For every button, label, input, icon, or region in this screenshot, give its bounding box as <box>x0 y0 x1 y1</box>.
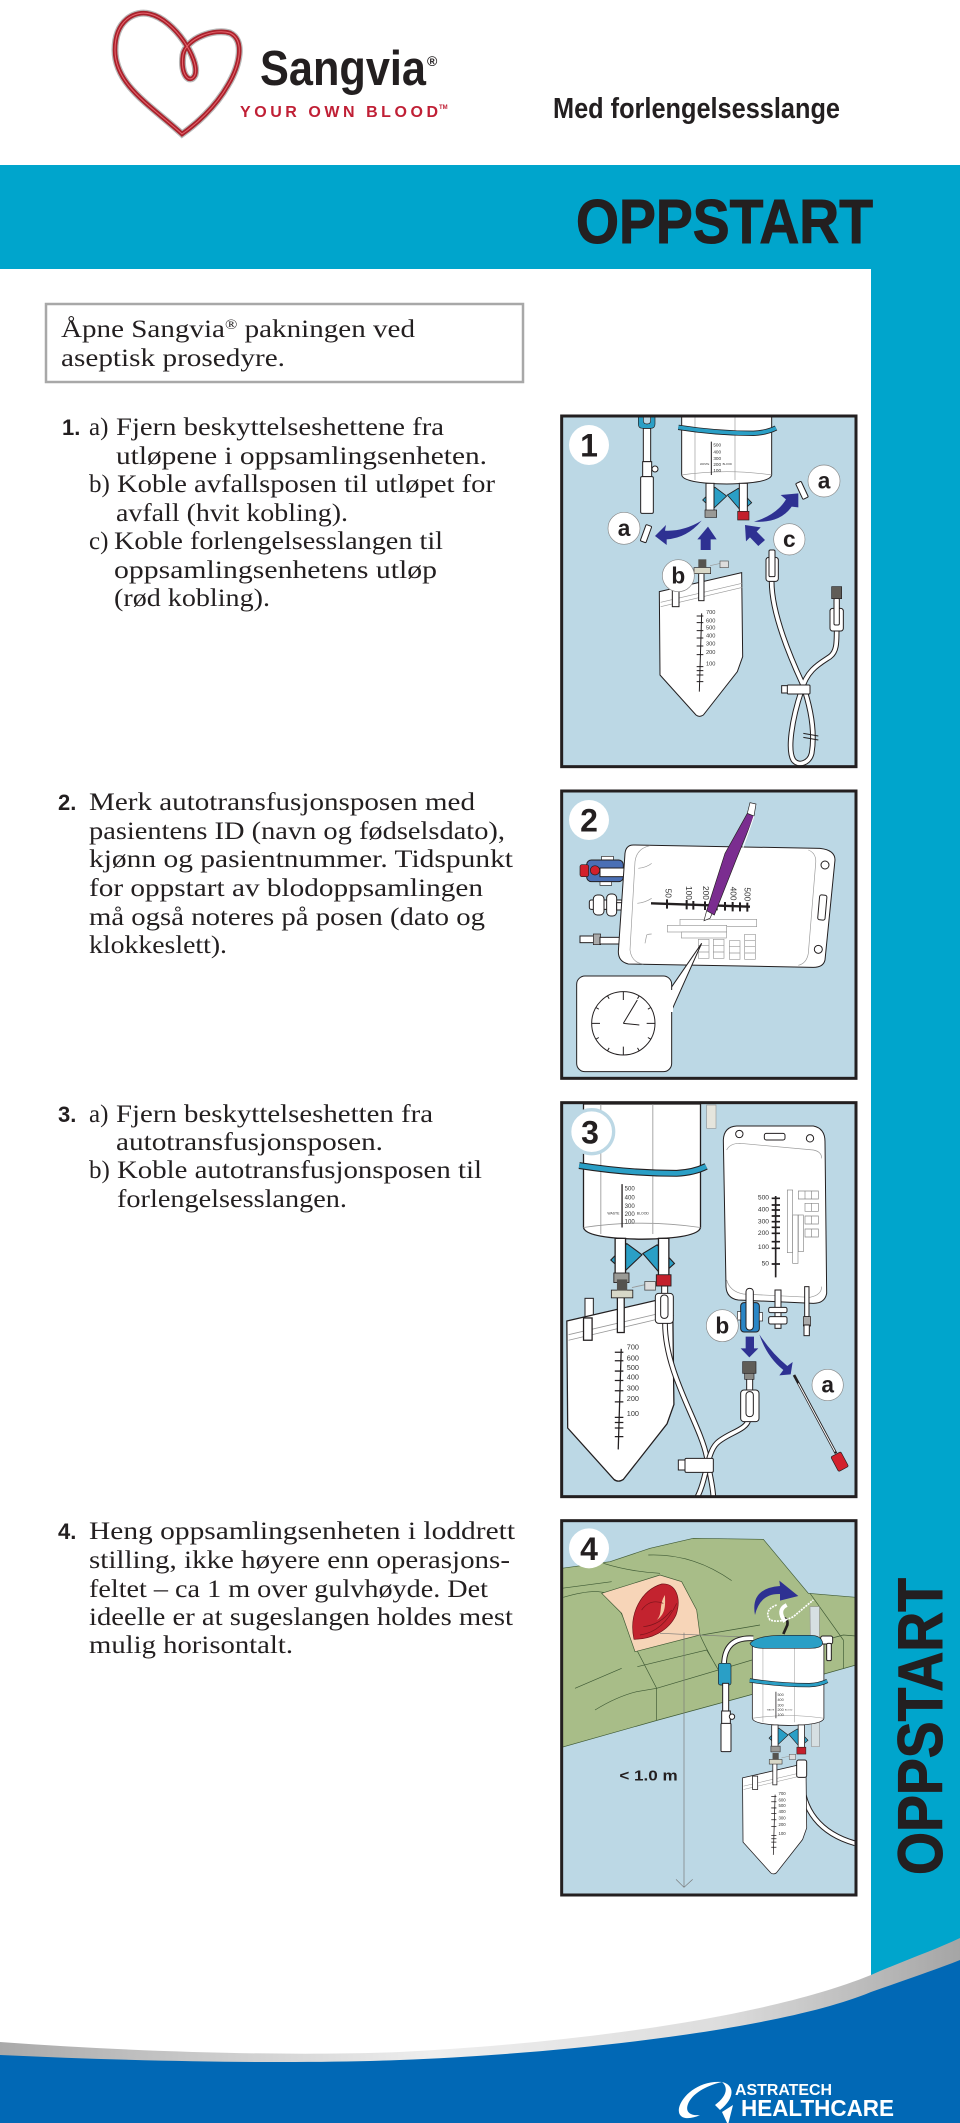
title: OPPSTART <box>576 188 873 257</box>
badge: 1: 1 <box>580 428 598 464</box>
icon: caps <box>640 481 808 543</box>
icon: stand <box>810 1607 819 1747</box>
icon: waste bag <box>659 559 743 716</box>
step 3 text: autotransfusjonsposen. <box>116 1129 383 1156</box>
intro box <box>46 304 523 382</box>
badge: 3: 3 <box>581 1114 599 1150</box>
icon: extension tube <box>766 550 843 763</box>
icon: connector and clamp <box>655 1286 713 1472</box>
step 1 text: Koble forlengelsesslangen til <box>114 528 443 555</box>
step 1 text: utløpene i oppsamlingsenheten. <box>116 443 487 470</box>
step 2 text: Merk autotransfusjonsposen med <box>89 789 476 816</box>
step 1 text: a) <box>89 414 108 441</box>
logo: Astra Tech Healthcare: HEALTHCARE <box>741 2095 894 2121</box>
step 1 text: Koble avfallsposen til utløpet for <box>117 471 496 498</box>
icon: luer connector <box>741 1362 759 1422</box>
icon: tube to right <box>802 1777 855 1843</box>
icon: hook chain <box>768 1600 813 1622</box>
intro box: ® <box>225 318 238 333</box>
step 4 text: mulig horisontalt. <box>89 1632 293 1659</box>
step 2 text: 2. <box>58 790 76 815</box>
chart: volume scale <box>651 886 753 912</box>
label: a <box>808 465 840 497</box>
badge: 1 <box>569 425 609 465</box>
badge: 2 <box>569 800 609 840</box>
logo: Astra Tech Healthcare <box>679 2082 894 2123</box>
step 3 text <box>58 1101 482 1213</box>
logo: Sangvia heart <box>115 13 448 134</box>
step 2 text: kjønn og pasientnummer. Tidspunkt <box>89 846 513 873</box>
label: a <box>608 512 640 544</box>
icon: tube to right inner <box>802 1777 855 1843</box>
step 4 text: stilling, ikke høyere enn operasjons- <box>89 1547 510 1574</box>
logo: Astra Tech Healthcare: ASTRATECH <box>735 2082 832 2099</box>
icon: removed cap <box>794 1375 849 1472</box>
step 4 text: 4. <box>58 1519 76 1544</box>
icon: pen <box>704 803 756 921</box>
step 1 text: (rød kobling). <box>114 585 270 612</box>
step 1 text: 1. <box>62 415 80 440</box>
icon: collection unit <box>579 1104 706 1286</box>
icon: autotransfusion bag: 300 <box>758 1218 769 1225</box>
logo: Sangvia heart: YOUR OWN BLOOD <box>240 104 438 121</box>
step 3 text: Fjern beskyttelseshetten fra <box>116 1101 433 1128</box>
icon: collection unit <box>678 418 778 520</box>
footer: silver curve <box>0 1938 960 2123</box>
step 1 text <box>62 414 496 612</box>
icon: autotransfusion bag: 50 <box>762 1261 769 1268</box>
chart: volume scale: 50 <box>663 889 673 898</box>
label: c <box>774 524 805 555</box>
step 3 text: a) <box>89 1101 108 1128</box>
label: a: a <box>818 468 831 494</box>
form: label fields <box>667 919 757 959</box>
arrow: bag up <box>697 527 717 550</box>
step 1 text: c) <box>89 528 108 555</box>
label: c: c <box>783 526 796 552</box>
intro box: pakningen ved <box>237 316 416 343</box>
icon: lid <box>750 1618 833 1661</box>
icon: waste bag <box>567 1279 674 1481</box>
panel: step 3 illustration <box>562 1103 856 1498</box>
panel: step 1 illustration <box>562 380 856 767</box>
chart: volume scale: 400 <box>728 887 738 901</box>
label: a: a <box>821 1372 834 1398</box>
label: a: a <box>618 515 631 541</box>
step 3 text: 3. <box>58 1102 76 1127</box>
step 4 text <box>58 1518 515 1659</box>
arrow: down <box>741 1337 758 1357</box>
logo: Sangvia heart: TM <box>439 105 448 111</box>
icon: autotransfusion bag: 500 <box>758 1195 769 1202</box>
icon: autotransfusion bag: 100 <box>758 1244 769 1251</box>
icon: suction tube <box>638 417 658 513</box>
step 2 text: klokkeslett). <box>89 932 227 959</box>
logo: Sangvia heart: Sangvia <box>260 42 427 96</box>
arrow: cap removed <box>759 1334 793 1375</box>
step 4 text: Heng oppsamlingsenheten i loddrett <box>89 1518 515 1545</box>
chart: volume scale: 100 <box>684 886 694 900</box>
icon: connectors <box>580 856 624 945</box>
arrow: cap a left <box>655 521 702 545</box>
icon: waste bag <box>743 1753 807 1874</box>
step 1 text: oppsamlingsenhetens utløp <box>114 557 437 584</box>
badge: 4: 4 <box>580 1531 598 1567</box>
arrow: tube connect <box>745 525 765 546</box>
step 2 text <box>58 789 513 959</box>
step 1 text: avfall (hvit kobling). <box>116 500 348 527</box>
step 3 text: forlengelsesslangen. <box>117 1186 347 1213</box>
icon: suction tube and clamp <box>718 1638 753 1752</box>
sidebar title: OPPSTART <box>886 1578 956 1875</box>
step 1 text: b) <box>89 471 110 498</box>
chart: volume scale: 200 <box>701 886 711 900</box>
step 1 text: Fjern beskyttelseshettene fra <box>116 414 444 441</box>
footer: blue band <box>0 1960 960 2123</box>
icon: bag ports <box>737 1287 811 1336</box>
icon: extension tube <box>665 1323 748 1498</box>
step 2 text: pasientens ID (navn og fødselsdato), <box>89 818 505 845</box>
arrow: cap a right <box>754 493 798 522</box>
icon: surgical site <box>602 1575 700 1652</box>
callout: clock <box>577 943 702 1072</box>
step 2 text: må også noteres på posen (dato og <box>89 904 486 931</box>
measure: height line <box>660 1633 752 1887</box>
chart: volume scale: 500 <box>743 887 753 902</box>
badge: 3 <box>570 1110 614 1154</box>
label: b: b <box>671 562 685 588</box>
icon: barb fitting <box>707 1105 716 1128</box>
icon: autotransfusion bag: 400 <box>758 1206 769 1213</box>
label: b: b <box>715 1312 729 1338</box>
panel: step 2 illustration <box>562 791 856 1078</box>
label: b <box>662 560 694 592</box>
icon: autotransfusion bag <box>618 845 835 967</box>
step 2 text: for oppstart av blodoppsamlingen <box>89 875 484 902</box>
label: a <box>812 1369 843 1401</box>
drape: green patient cover <box>562 1538 856 1747</box>
intro box: aseptisk prosedyre. <box>61 345 285 372</box>
icon: connector <box>797 1760 807 1777</box>
icon: waste bag vent stub <box>584 1298 594 1316</box>
label: b <box>706 1310 738 1342</box>
icon: collection unit <box>750 1643 827 1754</box>
badge: 4 <box>569 1528 609 1568</box>
logo: Sangvia heart: ® <box>427 53 438 69</box>
subtitle: Med forlengelsesslange <box>553 93 840 125</box>
badge: 2: 2 <box>580 803 598 839</box>
panel: step 4 illustration <box>562 1521 856 1895</box>
intro box: Åpne Sangvia <box>61 316 202 343</box>
step 3 text: b) <box>89 1157 110 1184</box>
step 3 text: Koble autotransfusjonsposen til <box>117 1157 482 1184</box>
arrow: hang <box>754 1581 798 1615</box>
step 4 text: ideelle er at sugeslangen holdes mest <box>89 1604 513 1631</box>
icon: autotransfusion bag <box>723 1126 827 1303</box>
icon: autotransfusion bag: 200 <box>758 1230 769 1237</box>
label: height: < 1.0 m <box>619 1768 678 1785</box>
step 4 text: feltet – ca 1 m over gulvhøyde. Det <box>89 1576 488 1603</box>
